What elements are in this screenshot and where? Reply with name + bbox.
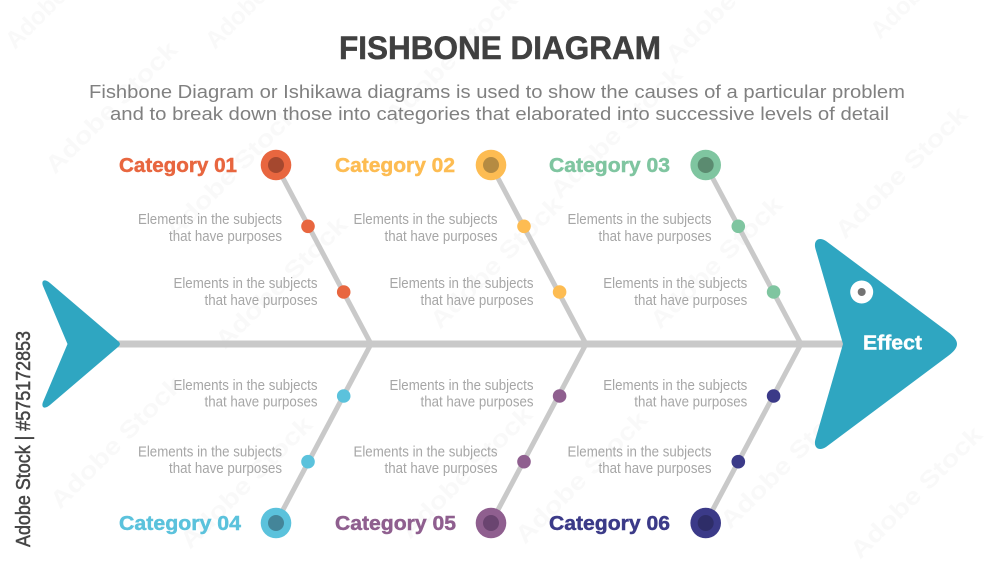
branch: category 01: Category 01	[119, 155, 237, 177]
branch: category 06: Elements in the subjects	[568, 444, 712, 460]
branch: category 04: Category 04	[119, 513, 242, 535]
stock watermark pattern: Adobe Stock	[210, 211, 354, 354]
branch: category 01: that have purposes	[169, 229, 282, 245]
branch: category 01	[119, 150, 371, 344]
stock watermark pattern: Adobe Stock	[645, 191, 789, 334]
branch: category 05	[335, 344, 586, 538]
branch: category 02: that have purposes	[420, 293, 534, 309]
stock watermark pattern: Adobe Stock	[510, 406, 654, 549]
branch: category 03: Category 03	[549, 155, 670, 177]
branch: category 04: Elements in the subjects	[174, 378, 318, 394]
branch: category 04: that have purposes	[169, 461, 282, 477]
subtitle description: and to break down those into categories that elaborated into successive levels of detail	[110, 103, 889, 124]
branch: category 03: Elements in the subjects	[603, 276, 747, 292]
branch: category 04	[119, 344, 371, 538]
icon: fish eye	[850, 280, 873, 304]
fish head	[815, 239, 957, 449]
branch: category 06: Category 06	[549, 513, 670, 535]
branch: category 06	[549, 344, 801, 538]
stock watermark pattern: Adobe Stock	[545, 61, 689, 204]
fish tail	[42, 280, 120, 408]
branch: category 01: Elements in the subjects	[174, 276, 318, 292]
branch: category 02: that have purposes	[384, 229, 498, 245]
title: FISHBONE DIAGRAM	[339, 30, 661, 66]
branch: category 05: Elements in the subjects	[354, 444, 498, 460]
branch: category 06: that have purposes	[598, 461, 712, 477]
branch: category 04: that have purposes	[204, 394, 318, 410]
vertical stock credit: Adobe Stock | #575172853	[13, 331, 35, 547]
branch: category 02: Elements in the subjects	[354, 212, 498, 228]
stock watermark pattern: Adobe Stock	[380, 0, 524, 129]
branch: category 02: Elements in the subjects	[390, 276, 534, 292]
stock watermark pattern: Adobe Stock	[715, 391, 859, 534]
branch: category 05: that have purposes	[420, 394, 534, 410]
subtitle description	[89, 81, 905, 124]
branch: category 02	[335, 150, 586, 344]
stock watermark pattern: Adobe Stock	[160, 101, 304, 244]
branch: category 02: Category 02	[335, 155, 455, 177]
branch: category 01: that have purposes	[204, 293, 318, 309]
branch: category 03: that have purposes	[598, 229, 712, 245]
stock watermark pattern: Adobe Stock	[175, 411, 319, 554]
branch: category 04: Elements in the subjects	[138, 444, 282, 460]
branch: category 05: that have purposes	[384, 461, 498, 477]
stock watermark pattern: Adobe Stock	[40, 36, 184, 179]
stock watermark pattern: Adobe Stock	[45, 371, 189, 514]
spine	[116, 340, 846, 348]
branch: category 03: Elements in the subjects	[568, 212, 712, 228]
stock watermark pattern: Adobe Stock	[395, 401, 539, 544]
stock watermark pattern: Adobe Stock	[830, 101, 974, 244]
branch: category 05: Category 05	[335, 513, 456, 535]
branch: category 06: Elements in the subjects	[603, 378, 747, 394]
branch: category 03	[549, 150, 801, 344]
branch: category 03: that have purposes	[634, 293, 747, 309]
subtitle description: Fishbone Diagram or Ishikawa diagrams is used to show the causes of a particular problem	[89, 81, 905, 102]
branch: category 06: that have purposes	[634, 394, 747, 410]
stock watermark pattern: Adobe Stock	[845, 421, 989, 563]
branch: category 05: Elements in the subjects	[390, 378, 534, 394]
stock watermark pattern: Adobe Stock	[425, 191, 569, 334]
effect label: Effect	[863, 332, 922, 354]
branch: category 01: Elements in the subjects	[138, 212, 282, 228]
